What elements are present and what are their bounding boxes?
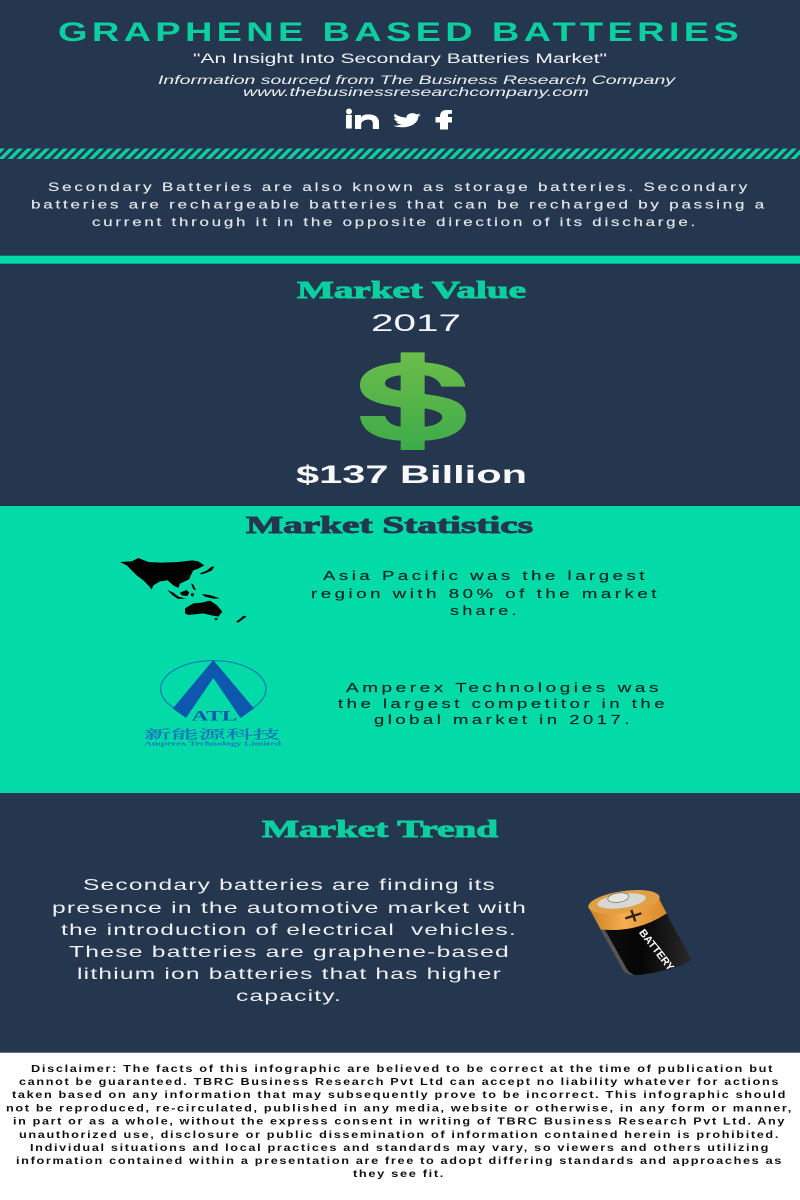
disclaimer text: Individual situations and local practices and standards may vary, so viewers and others utilizing: [30, 1143, 770, 1154]
asia pacific text: region with 80% of the market: [311, 586, 660, 601]
icon: ATL logo: Amperex Technology Limited: [144, 742, 282, 748]
disclaimer text: taken based on any information that may subsequently prove to be incorrect. This infographic should: [12, 1090, 787, 1101]
panel: market value: [296, 278, 527, 489]
disclaimer text: in part or as a whole, without the express consent in writing of TBRC Business Research Pvt Ltd. Any: [13, 1116, 786, 1128]
disclaimer text: [6, 1064, 793, 1180]
amperex text: Amperex Technologies was: [346, 680, 662, 695]
heading: market statistics: Market Statistics: [246, 513, 533, 539]
year: 2017: [371, 310, 461, 337]
social icons: [346, 108, 452, 130]
icon: facebook: [436, 110, 452, 130]
disclaimer text: Disclaimer: The facts of this infographic are believed to be correct at the time of publication but: [31, 1064, 774, 1075]
source credit: [158, 73, 677, 99]
asia pacific text: [311, 568, 660, 618]
striped divider: [0, 148, 800, 159]
trend text: These batteries are graphene-based: [69, 944, 510, 961]
panel: market statistics: [0, 506, 800, 793]
source credit: www.thebusinessresearchcompany.com: [243, 85, 589, 99]
icon: linkedin: [346, 108, 379, 129]
icon: asia pacific map: [120, 558, 247, 623]
teal band: [0, 256, 800, 264]
title: GRAPHENE BASED BATTERIES: [58, 17, 743, 47]
icon: ATL logo: [144, 660, 282, 748]
trend text: capacity.: [236, 988, 342, 1005]
source credit: Information sourced from The Business Research Company: [158, 73, 677, 87]
intro paragraph: [31, 180, 767, 229]
icon: dollar sign: [360, 352, 466, 450]
heading: market trend: Market Trend: [262, 817, 499, 843]
asia pacific text: share.: [450, 603, 520, 618]
intro paragraph: batteries are rechargeable batteries that can be recharged by passing a: [31, 198, 767, 212]
asia pacific text: Asia Pacific was the largest: [323, 568, 648, 583]
icon: twitter: [393, 113, 421, 127]
disclaimer text: cannot be guaranteed. TBRC Business Research Pvt Ltd can accept no liability whatever for actions: [19, 1077, 780, 1088]
market value figure: $137 Billion: [296, 461, 527, 489]
disclaimer text: information contained within a presentation are free to adopt differing standards and approaches as: [16, 1156, 783, 1167]
disclaimer text: unauthorized use, disclosure or public dissemination of information contained herein is prohibited.: [19, 1130, 780, 1141]
icon: ATL logo: 新能源科技: [144, 726, 280, 742]
subtitle: "An Insight Into Secondary Batteries Market": [193, 51, 607, 66]
icon: battery: BATTERY: [636, 927, 676, 973]
amperex text: [338, 680, 668, 727]
trend text: presence in the automotive market with: [52, 900, 527, 917]
amperex text: the largest competitor in the: [338, 696, 668, 711]
disclaimer text: not be reproduced, re-circulated, published in any media, website or otherwise, in any form or manner,: [6, 1104, 793, 1114]
trend text: Secondary batteries are finding its: [83, 877, 496, 894]
panel: market trend: [52, 817, 692, 1005]
intro paragraph: Secondary Batteries are also known as storage batteries. Secondary: [48, 180, 750, 194]
trend text: [52, 877, 527, 1005]
icon: ATL logo: ATL: [192, 708, 237, 724]
trend text: the introduction of electrical vehicles.: [61, 922, 517, 939]
heading: market value: Market Value: [297, 278, 527, 304]
amperex text: global market in 2017.: [374, 712, 633, 727]
icon: battery: [587, 886, 692, 975]
disclaimer text: they see fit.: [353, 1169, 445, 1180]
panel: disclaimer: [0, 1053, 800, 1200]
intro paragraph: current through it in the opposite direction of its discharge.: [92, 215, 698, 229]
trend text: lithium ion batteries that has higher: [77, 966, 502, 983]
